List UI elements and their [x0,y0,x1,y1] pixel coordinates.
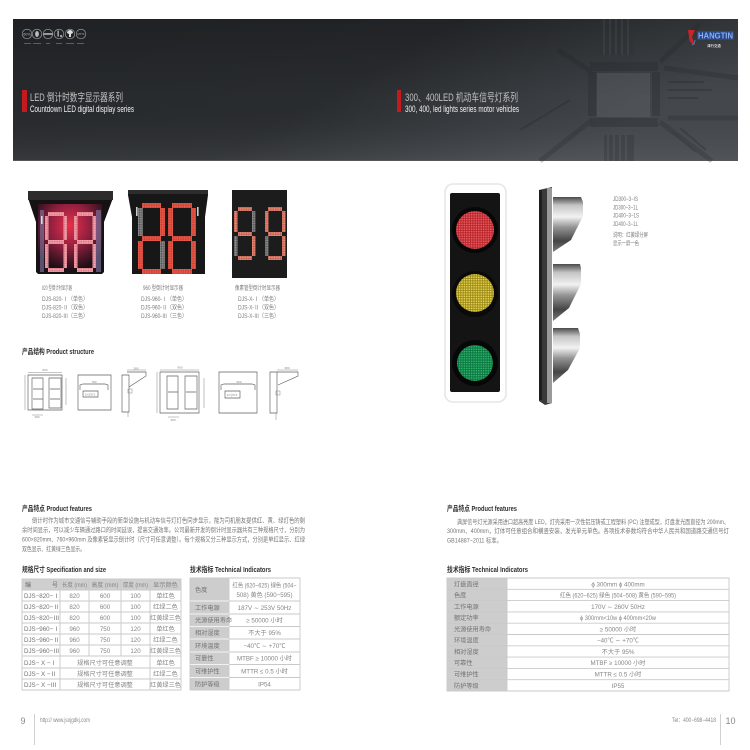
table: specification and size [22,579,181,690]
logo: HANGTIN [698,32,733,41]
table: left technical indicators: 色度 [195,586,207,594]
product: pixel tube display [232,190,287,278]
structure drawings: 820 [42,368,48,372]
table: right technical indicators [447,578,729,691]
footer: right phone and page number [672,714,736,745]
structure drawings: 960 [177,366,183,370]
table: specification and size: 120 [130,648,141,655]
table: specification and size: 规格尺寸可任意调整 [77,670,133,678]
table: right technical indicators: ϕ 300mm<10w ϕ 400mm<20w [580,615,656,622]
table: specification and size: 规格尺寸可任意调整 [77,659,133,667]
table: left technical indicators: 红色 (620−625) 绿色 (504− [232,582,297,590]
intersection map backdrop [520,19,738,161]
table: specification and size: 820 [69,604,80,611]
table: right technical indicators: MTTR ≤ 0.5 小时 [595,670,641,678]
table: specification and size: 红绿二色 [153,603,178,611]
table: right technical indicators: 光源使用寿命 [454,626,491,634]
table: specification and size: 120 [130,626,141,633]
captions: pixel tube display: DJS-X-Ⅰ（单色） [238,295,279,303]
table: right technical indicators: 工作电源 [454,603,479,611]
table: left technical indicators: 可靠性 [195,654,214,662]
table: right technical indicators: 防护等级 [454,682,479,690]
lamp: red [456,211,494,249]
table: specification and size: 600 [100,615,111,622]
table: left technical indicators: 防护等级 [195,680,220,688]
icon row: six certification badges: MTTF [78,32,85,36]
table: specification and size: 100 [130,593,141,600]
table: left technical indicators: −40℃ ∼ +70℃ [244,643,286,650]
table: right technical indicators: 额定功率 [454,614,479,622]
table: specification and size: DJS−820−Ⅲ [24,615,59,622]
panel: left product features: 倒计时作为城市交通信号辅助手段的新型设施与机动车信号灯灯色同步显示，能为司机朋友提供红、黄、绿灯色的剩 [32,516,305,524]
table: right technical indicators: 红色 (620−625) 绿色 (504−508) 黄色 (590−595) [560,592,676,600]
table: specification and size: DJS− X −Ⅱ [24,671,57,678]
footer: right phone and page number: Tel：400−698−4418 [672,718,717,724]
heading: left features: 产品特点 Product features [22,504,92,513]
captions: 960 display [141,284,187,320]
table: left technical indicators: 环境温度 [195,642,220,650]
table: right technical indicators: IP55 [612,683,625,690]
table: specification and size: 600 [100,593,111,600]
table: specification and size: 红绿二色 [153,636,178,644]
table: specification and size: 红黄绿三色 [150,614,181,622]
captions: 820 display: 820 型倒计时显示器 [42,284,72,292]
table: specification and size: 820 [69,615,80,622]
captions: 820 display: DJS-820-Ⅰ（单色） [42,295,88,303]
table: left technical indicators: 508) 黄色 (590−595) [236,591,292,599]
lamp: green [457,345,493,381]
captions: 960 display: DJS-960-Ⅲ（三色） [141,312,187,320]
captions: 820 display: DJS-820-Ⅲ（三色） [42,312,88,320]
product: 960 display [128,190,208,274]
table: specification and size: DJS− X −Ⅰ [24,660,57,667]
heading: motor vehicle signal series [397,90,519,114]
models note: 显示一屏一色 [613,240,639,248]
table: right technical indicators: −40℃ ∼ +70℃ [597,638,639,644]
footer: left page number and url: 9 [20,716,26,726]
heading: specification and size: 规格尺寸 Specification and size [22,565,106,574]
table: right technical indicators: 可维护性 [454,670,479,678]
table: left technical indicators: 不大于 95% [248,629,281,637]
table: right technical indicators: 灯盘直径 [454,580,479,588]
heading: product structure: 产品结构 Product structure [22,347,94,356]
models note: JD300−3−1L [613,206,638,212]
table: right technical indicators: 色度 [454,592,466,600]
table: right technical indicators: MTBF ≥ 10000 小时 [591,659,645,667]
captions: 960 display: 960 型倒计时显示器 [143,284,183,292]
logo [688,30,734,48]
heading: left technical indicators: 技术指标 Technical Indicators [190,565,271,574]
table: specification and size: 120 [130,637,141,644]
structure drawings: 380 [133,366,139,370]
table: left technical indicators: 可维护性 [195,668,220,676]
structure drawings: 2×∅8.5 [227,393,238,397]
structure drawings: 480 [34,415,40,419]
models note: JD400−3−1L [613,222,638,228]
table: specification and size: 单红色 [156,625,175,633]
table: specification and size: 红黄绿三色 [150,647,181,655]
table: right technical indicators: ≥ 50000 小时 [600,626,636,634]
table: specification and size: 长度 (mm) [62,581,87,589]
table: specification and size: DJS−960−Ⅱ [24,637,59,644]
structure drawings: 780 [91,380,97,384]
table: specification and size: 显示颜色 [153,581,178,589]
table: right technical indicators: ϕ 300mm ϕ 400mm [591,582,645,588]
lamp: yellow [456,274,494,312]
captions: pixel tube display: DJS-X-Ⅱ（双色） [238,304,279,312]
captions: 820 display [42,284,88,320]
structure drawings: 900 [236,380,242,384]
structure drawings: 480 [170,418,176,422]
table: specification and size: DJS− X −Ⅲ [24,682,57,689]
table: specification and size: 600 [100,604,111,611]
captions: 960 display: DJS-960-Ⅰ（单色） [141,295,187,303]
banner: dark header [13,19,738,161]
heading: countdown display series: LED 倒计时数字显示器系列 [30,90,123,104]
table: left technical indicators: IP54 [258,682,271,688]
heading: countdown display series [22,90,134,114]
table: specification and size: 红黄绿三色 [150,681,181,689]
table: specification and size: 单红色 [156,659,175,667]
captions: 960 display: DJS-960-Ⅱ（双色） [141,304,187,312]
table: left technical indicators: 工作电源 [195,604,220,612]
structure drawings: 380 [284,366,290,370]
table: left technical indicators: ≥ 50000 小时 [246,616,283,624]
table: specification and size: 厚度 (mm) [123,581,148,589]
panel: left product features: 双色显示、红黄绿三色显示。 [22,544,85,553]
panel: right product features: GB14887−2011 标准。 [447,536,502,544]
traffic light front view [445,184,506,402]
table: specification and size: 高度 (mm) [92,581,118,589]
table: right technical indicators: 相对湿度 [454,648,479,656]
panel: left product features: 600×820mm、760×960mm 及像素管显示倒计时（尺寸可任意调整）。每个规格又分三种显示方式，分别是单红显示、红绿 [22,534,306,544]
icon row: six certification badges: 60% [23,32,31,36]
table: specification and size: 960 [69,626,80,633]
captions: 820 display: DJS-820-Ⅱ（双色） [42,304,88,312]
heading: right technical indicators: 技术指标 Technical Indicators [447,565,528,574]
heading: motor vehicle signal series: 300, 400, led lights series motor vehicles [405,104,519,114]
table: specification and size: DJS−820−Ⅰ [24,593,59,600]
table: specification and size: 820 [69,593,80,600]
panel: left product features [22,504,306,553]
heading: motor vehicle signal series: 300、400LED 机动车信号灯系列 [405,90,518,104]
structure drawings [25,366,298,422]
icon row: six certification badges [22,29,86,44]
table: left technical indicators [190,578,300,690]
table: specification and size: 规格尺寸可任意调整 [77,681,133,689]
table: specification and size: 750 [100,637,111,644]
captions: pixel tube display: DJS-X-Ⅲ（三色） [238,312,279,320]
table: specification and size: DJS−960−Ⅲ [24,648,59,655]
table: specification and size: 号 [52,582,58,589]
traffic light side view [539,187,583,405]
table: specification and size: DJS−820−Ⅱ [24,604,59,611]
captions: pixel tube display: 像素管型倒计时显示器 [235,284,280,292]
table: specification and size: 750 [100,626,111,633]
table: left technical indicators: 187V ∼ 253V 50Hz [238,605,291,612]
table: left technical indicators: MTBF ≥ 10000 小时 [237,654,292,662]
table: specification and size: 960 [69,637,80,644]
table: right technical indicators: 可靠性 [454,659,473,667]
logo: 泽行交通 [707,43,721,48]
models note: 说明：红黄绿分屏 [613,231,648,239]
table: specification and size: 100 [130,615,141,622]
models note [613,197,648,248]
panel: right product features [447,504,730,544]
captions: pixel tube display [235,284,280,320]
product: 820 display [28,191,113,274]
panel: left product features: 余时间显示，可以减少车辆通过路口的时间延误，提高交通效率。公司最新开发的倒计时显示器共有三种规格尺寸，分别为 [22,525,305,534]
table: left technical indicators: 光源使用寿命 [195,616,232,624]
table: specification and size: DJS−960−Ⅰ [24,626,59,633]
heading: countdown display series: Countdown LED digital display series [30,104,134,114]
footer: right phone and page number: 10 [726,716,736,726]
table: specification and size: 750 [100,648,111,655]
table: specification and size: 单红色 [156,592,175,600]
table: specification and size: 100 [130,604,141,611]
footer: left page number and url [20,714,90,745]
table: specification and size: 红绿二色 [153,670,178,678]
table: specification and size: 960 [69,648,80,655]
table: right technical indicators: 不大于 95% [602,648,635,656]
heading: right features: 产品特点 Product features [447,504,517,513]
table: left technical indicators: MTTR ≤ 0.5 小时 [241,668,288,676]
table: specification and size: 编 [25,581,31,589]
footer: left page number and url: http:// www.jsxjgdkj.com [40,718,90,724]
structure drawings: 2×∅8.5 [85,392,96,396]
models note: JD400−3−1S [613,214,639,220]
models note: JD300−3−IS [613,197,638,203]
table: left technical indicators: 相对湿度 [195,629,220,637]
table: right technical indicators: 环境温度 [454,636,479,644]
table: right technical indicators: 170V ∼ 260V 50Hz [591,604,645,611]
